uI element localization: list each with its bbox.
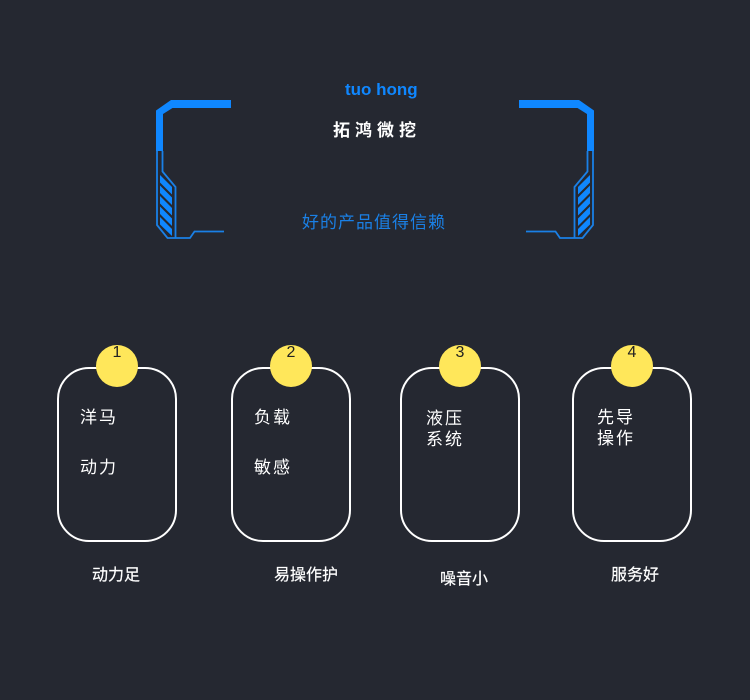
caption: 动力足: 动力足 — [92, 567, 140, 584]
badge: number 2 — [270, 345, 312, 387]
card 2 text: 负载: 负载 — [254, 408, 292, 427]
panel: card 3 outline — [400, 367, 520, 542]
right bracket — [519, 100, 594, 238]
card 3 text: 液压系统 — [426, 409, 464, 449]
caption: 噪音小: 噪音小 — [440, 571, 488, 588]
badge: number 4: 4 — [628, 344, 636, 361]
badge: number 3: 3 — [456, 344, 464, 361]
badge: number 1 — [96, 345, 138, 387]
caption: 服务好: 服务好 — [611, 567, 659, 584]
badge: number 2: 2 — [287, 344, 295, 361]
card 4 text: 先导操作: 先导 — [597, 408, 635, 427]
card 4 text: 先导操作 — [597, 408, 635, 448]
card 2 text: 敏感: 敏感 — [254, 458, 292, 477]
subtitle: 好的产品值得信赖 — [302, 213, 446, 232]
panel: card 1 outline — [57, 367, 177, 542]
left bracket — [156, 100, 231, 238]
title: 拓鸿微挖 — [333, 121, 421, 140]
badge: number 3 — [439, 345, 481, 387]
card 3 text: 液压系统: 系统 — [426, 430, 464, 449]
caption: 易操作护: 易操作护 — [274, 567, 338, 584]
badge: number 1: 1 — [113, 344, 121, 361]
card 3 text: 液压系统: 液压 — [426, 409, 464, 428]
card 1 text: 动力: 动力 — [80, 458, 118, 477]
heading: tuo hong: tuo hong — [345, 80, 418, 99]
card 4 text: 先导操作: 操作 — [597, 429, 635, 448]
badge: number 4 — [611, 345, 653, 387]
panel: card 2 outline — [231, 367, 351, 542]
card 1 text: 洋马: 洋马 — [80, 408, 118, 427]
panel: card 4 outline — [572, 367, 692, 542]
